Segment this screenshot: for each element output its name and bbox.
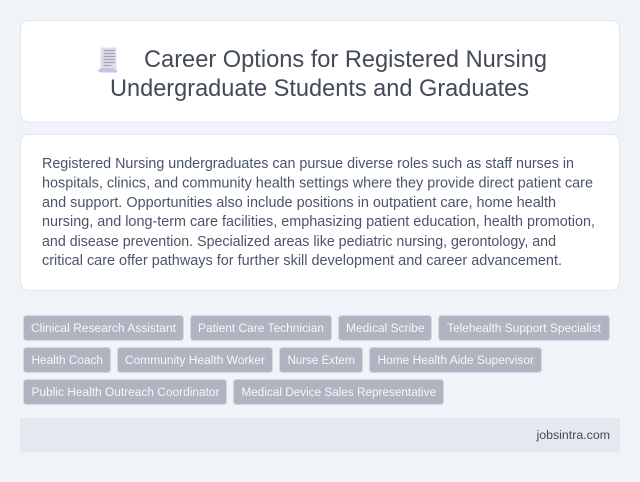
- tag: Health Coach: Health Coach: [32, 353, 103, 367]
- tag: Medical Device Sales Representative: Medical Device Sales Representative: [242, 385, 436, 399]
- summary text block: [42, 156, 595, 269]
- footer source text: jobsintra.com: [536, 428, 610, 442]
- summary text block: nursing, and long-term care facilities, emphasizing patient education, health promotion,: [42, 214, 595, 230]
- career tags: [24, 316, 610, 404]
- tag: Nurse Extern: [280, 348, 362, 372]
- footer bar: [20, 418, 620, 452]
- tag: Medical Scribe: [338, 316, 432, 340]
- tag: Nurse Extern: Nurse Extern: [288, 353, 355, 367]
- tag: Clinical Research Assistant: Clinical Research Assistant: [31, 321, 177, 335]
- summary text block: and disease prevention. Specialized areas like pediatric nursing, gerontology, and: [42, 234, 556, 250]
- tag: Home Health Aide Supervisor: Home Health Aide Supervisor: [378, 353, 534, 367]
- heading: [110, 46, 547, 102]
- tag: Telehealth Support Specialist: Telehealth Support Specialist: [447, 321, 602, 335]
- panel: summary card: [20, 134, 620, 290]
- tag: Public Health Outreach Coordinator: [24, 380, 226, 404]
- tag: Clinical Research Assistant: [24, 316, 184, 340]
- tag: Patient Care Technician: Patient Care Technician: [198, 321, 324, 335]
- tag: Home Health Aide Supervisor: [370, 348, 542, 372]
- heading: Undergraduate Students and Graduates: [110, 75, 529, 102]
- tag: Health Coach: [24, 348, 110, 372]
- tag: Community Health Worker: [118, 348, 272, 372]
- heading: Career Options for Registered Nursing: [144, 46, 547, 73]
- summary text block: critical care offer pathways for further skill development and career advancement.: [42, 253, 562, 269]
- summary text block: and support. Opportunities also include positions in outpatient care, home health: [42, 195, 556, 211]
- tag: Medical Scribe: Medical Scribe: [346, 321, 425, 335]
- tag: Public Health Outreach Coordinator: Public Health Outreach Coordinator: [32, 385, 220, 399]
- tag: Telehealth Support Specialist: [438, 316, 610, 340]
- summary text block: Registered Nursing undergraduates can pursue diverse roles such as staff nurses in: [42, 156, 574, 172]
- tag: Patient Care Technician: [190, 316, 332, 340]
- summary text block: hospitals, clinics, and community health settings where they provide direct patient care: [42, 176, 593, 192]
- icon: document scroll: [98, 48, 118, 72]
- tag: Medical Device Sales Representative: [234, 380, 444, 404]
- tag: Community Health Worker: Community Health Worker: [125, 353, 265, 367]
- panel: title card: [20, 20, 620, 122]
